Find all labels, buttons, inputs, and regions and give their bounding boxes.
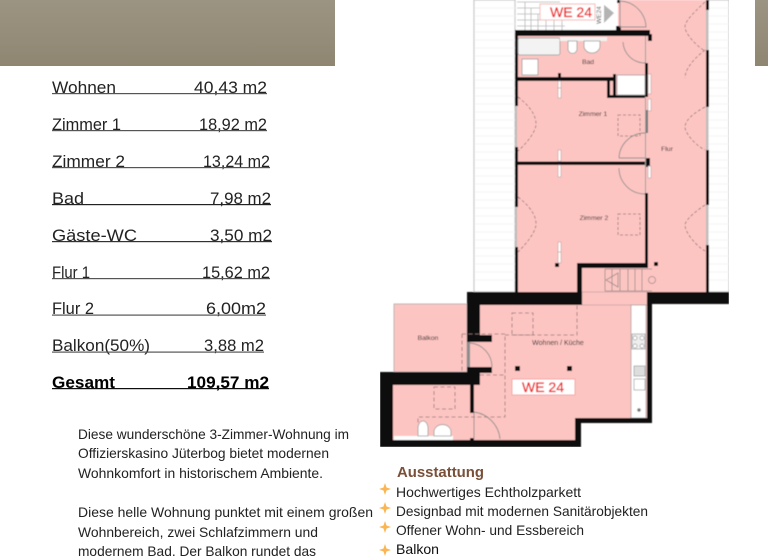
stair hall white xyxy=(516,0,617,31)
balcony xyxy=(394,304,467,372)
room labels: Bad xyxy=(582,59,594,66)
banner right xyxy=(755,0,768,66)
lower walls xyxy=(380,292,729,447)
row: Wohnen: 40,43 m2 xyxy=(194,78,267,97)
row: Flur 1: 15,62 m2 xyxy=(202,263,270,282)
features list: Balkon xyxy=(396,541,439,557)
description text: modernem Bad. Der Balkon rundet das xyxy=(78,543,316,559)
room labels: Balkon xyxy=(418,335,439,342)
description text: Diese helle Wohnung punktet mit einem großen xyxy=(78,504,373,520)
row: Gesamt: Gesamt xyxy=(52,373,115,392)
label: WE 24 bottom: WE 24 xyxy=(522,379,564,395)
door arcs and dashed slopes xyxy=(619,0,646,194)
row: Balkon xyxy=(52,336,264,355)
features list: Hochwertiges Echtholzparkett xyxy=(396,484,581,500)
row: Wohnen xyxy=(52,78,267,97)
room labels: Zimmer 2 xyxy=(580,215,609,222)
floor plan xyxy=(380,0,729,447)
room labels: Zimmer 1 xyxy=(579,111,608,118)
row: Gäste-WC: Gäste-WC xyxy=(52,226,137,245)
description text xyxy=(78,426,373,559)
upper floor pink area xyxy=(516,0,707,292)
banner left xyxy=(0,0,335,66)
entrance arrow: WE24 xyxy=(596,6,603,24)
row: Flur 2: 6,00m2 xyxy=(206,299,266,318)
row: Zimmer 2: 13,24 m2 xyxy=(203,152,270,171)
features list xyxy=(396,484,648,557)
label: WE 24 top: WE 24 xyxy=(550,4,592,20)
description text: Wohnkomfort in historischem Ambiente. xyxy=(78,465,323,481)
room labels xyxy=(418,59,674,347)
features list: Offener Wohn- und Essbereich xyxy=(396,522,584,538)
row: Gäste-WC: 3,50 m2 xyxy=(210,226,272,245)
row: Flur 1: Flur 1 xyxy=(52,263,90,282)
guest WC fixtures xyxy=(394,421,453,440)
row: Balkon: 3,88 m2 xyxy=(204,336,264,355)
room labels: Flur xyxy=(661,146,674,153)
bathroom fixtures xyxy=(518,37,645,95)
gray partitions and windows xyxy=(516,10,707,247)
row: Gäste-WC xyxy=(52,226,272,245)
upper walls xyxy=(515,0,709,299)
row: Flur 1 xyxy=(52,263,270,282)
row: Zimmer 1 xyxy=(52,115,267,134)
lower doors and dashed lines xyxy=(470,343,500,439)
pillar slots xyxy=(558,74,651,263)
area table xyxy=(52,78,272,392)
description text: Offizierskasino Jüterbog bietet modernen xyxy=(78,445,329,461)
row: Bad xyxy=(52,189,271,208)
row: Zimmer 2 xyxy=(52,152,270,171)
row: Flur 2 xyxy=(52,299,266,318)
stair to lower floor xyxy=(605,269,656,291)
row: Bad: Bad xyxy=(52,189,84,208)
row: Balkon: Balkon(50%) xyxy=(52,336,150,355)
entrance arrow xyxy=(595,3,614,24)
stair landing pink xyxy=(582,292,647,305)
row: Zimmer 1: Zimmer 1 xyxy=(52,115,121,134)
icons: bullet stars xyxy=(379,483,391,556)
row: Flur 2: Flur 2 xyxy=(52,299,94,318)
description text: Diese wunderschöne 3-Zimmer-Wohnung im xyxy=(78,426,349,442)
row: Zimmer 2: Zimmer 2 xyxy=(52,152,125,171)
kitchen xyxy=(631,305,646,418)
upper floor side terraces xyxy=(474,0,729,292)
row: Gesamt xyxy=(52,373,269,392)
room labels: Wohnen / Küche xyxy=(532,340,584,347)
row: Zimmer 1: 18,92 m2 xyxy=(199,115,267,134)
features heading: Ausstattung xyxy=(397,464,484,481)
row: Gesamt: 109,57 m2 xyxy=(187,373,269,392)
label: WE 24 bottom xyxy=(512,379,575,395)
features list: Designbad mit modernen Sanitärobjekten xyxy=(396,503,648,519)
lower floor pink xyxy=(393,305,647,440)
description text: Wohnbereich, zwei Schlafzimmern und xyxy=(78,524,318,540)
row: Wohnen: Wohnen xyxy=(52,78,116,97)
row: Bad: 7,98 m2 xyxy=(210,189,271,208)
